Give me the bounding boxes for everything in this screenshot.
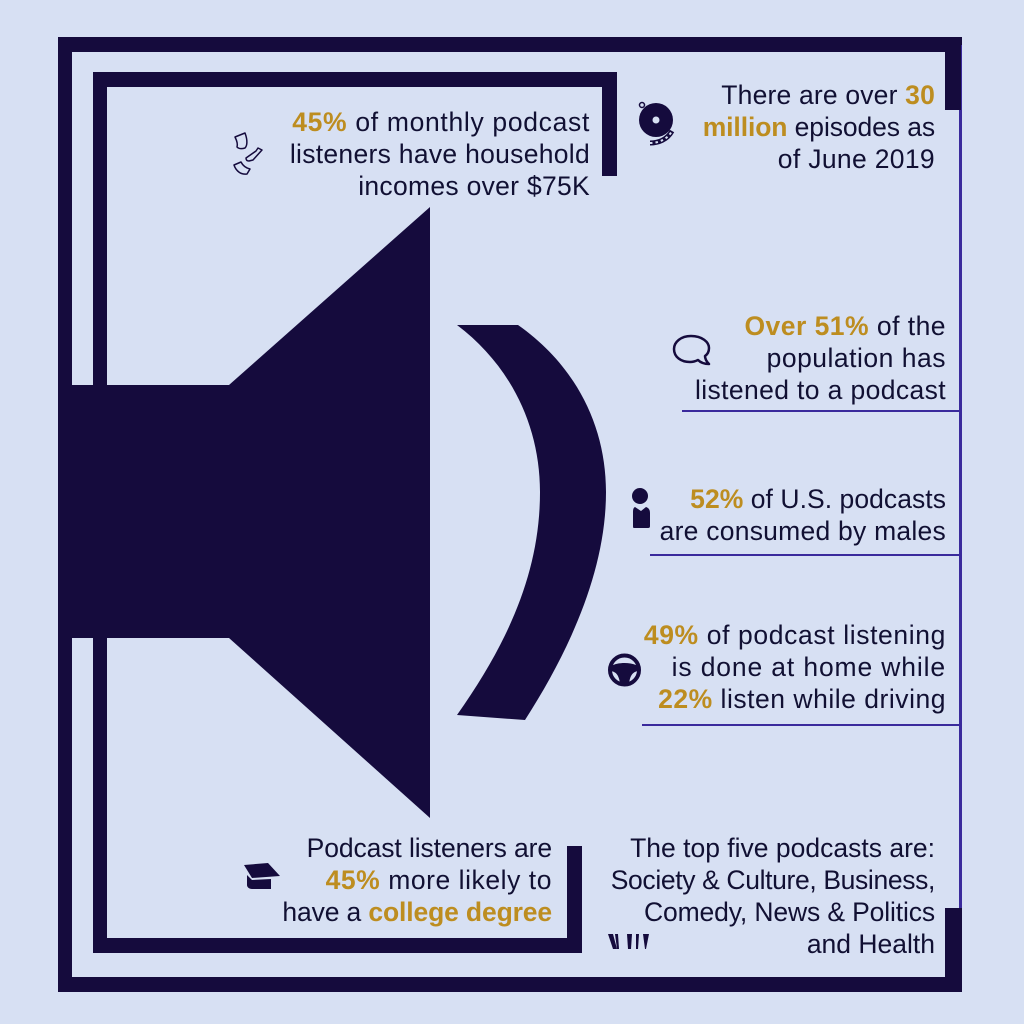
text: top five podcasts: and Health	[807, 929, 935, 959]
text: college degree: Podcast listeners are	[307, 833, 552, 863]
divider lines	[642, 410, 960, 726]
text: college degree: have a college degree	[282, 897, 552, 927]
text: listening location: 49% of podcast listening	[644, 620, 946, 650]
text: listening location	[644, 620, 946, 714]
icon: film reel	[639, 102, 673, 143]
icon: speech bubble	[674, 336, 709, 364]
text: episodes: of June 2019	[778, 144, 935, 174]
text: household income: listeners have household	[290, 139, 590, 169]
text: population	[695, 311, 946, 405]
text: listening location: is done at home while	[672, 652, 946, 682]
text: episodes	[703, 80, 935, 174]
icon: graduation cap	[244, 863, 280, 889]
icon: money bills	[234, 133, 262, 174]
text: males: are consumed by males	[660, 516, 946, 546]
text: episodes: There are over 30	[721, 80, 935, 110]
text: males: 52% of U.S. podcasts	[690, 484, 946, 514]
text: top five podcasts	[611, 833, 935, 959]
text: household income	[290, 107, 590, 201]
text: males	[660, 484, 946, 546]
text: college degree: 45% more likely to	[326, 865, 552, 895]
text: top five podcasts: Society & Culture, Business,	[611, 865, 935, 895]
text: college degree	[282, 833, 552, 927]
icon: person	[632, 488, 650, 528]
text: household income: incomes over $75K	[358, 171, 590, 201]
sound wave arc	[457, 325, 606, 720]
text: household income: 45% of monthly podcast	[292, 107, 590, 137]
text: top five podcasts: Comedy, News & Politics	[644, 897, 935, 927]
inner frame	[93, 72, 617, 953]
text: population: listened to a podcast	[695, 375, 946, 405]
text: population: population has	[767, 343, 946, 373]
text: population: Over 51% of the	[744, 311, 946, 341]
icon: steering wheel	[610, 656, 639, 684]
text: episodes: million episodes as	[703, 112, 935, 142]
icon: five bars	[608, 934, 649, 949]
speaker cone	[58, 207, 430, 818]
text: listening location: 22% listen while driving	[658, 684, 946, 714]
text: top five podcasts: The top five podcasts are:	[630, 833, 935, 863]
